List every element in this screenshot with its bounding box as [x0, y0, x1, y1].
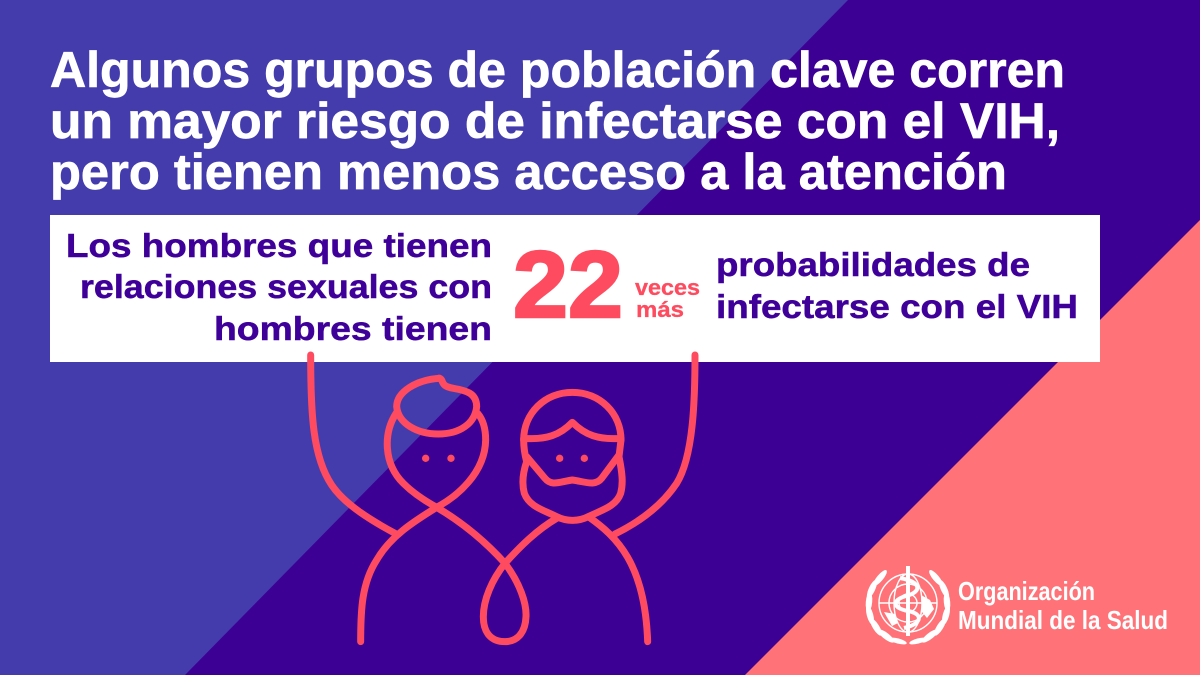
logo text: [958, 576, 1168, 635]
eyes: [422, 455, 588, 462]
text: population group: [66, 227, 492, 347]
panel: statistic banner: [50, 215, 1100, 362]
number: 22 times: [513, 232, 700, 338]
left figure head and ribbon body: [387, 413, 557, 642]
left figure hair: [397, 378, 477, 434]
text: population group: Los hombres que tienen: [66, 227, 492, 264]
right figure fringe: [524, 422, 621, 439]
title: Algunos grupos de población clave corren: [50, 42, 1065, 98]
text: infection probability: probabilidades de: [716, 246, 1030, 283]
title: un mayor riesgo de infectarse con el VIH,: [50, 93, 1060, 149]
title: pero tienen menos acceso a la atención: [50, 144, 1007, 200]
number: 22 times: más: [636, 297, 684, 322]
left figure shoulder and face: [361, 413, 486, 642]
title: [50, 42, 1065, 200]
text: population group: hombres tienen: [214, 310, 492, 347]
logo text: Mundial de la Salud: [958, 605, 1168, 635]
left arm: [311, 355, 395, 533]
text: infection probability: infectarse con el VIH: [716, 288, 1078, 325]
right arm: [615, 355, 695, 534]
number: 22 times: veces: [635, 275, 700, 300]
logo text: Organización: [958, 576, 1095, 606]
right figure beard outline: [523, 440, 622, 520]
logo: World Health Organization: [864, 566, 1168, 646]
right figure moustache: [527, 455, 619, 483]
text: population group: relaciones sexuales con: [80, 268, 492, 305]
right figure hair: [524, 392, 621, 440]
text: infection probability: [716, 246, 1078, 325]
right figure shoulder: [588, 517, 648, 642]
icon: WHO emblem: [864, 566, 952, 646]
number: 22 times: 22: [513, 232, 623, 338]
illustration: two men holding up the banner: [311, 355, 695, 642]
